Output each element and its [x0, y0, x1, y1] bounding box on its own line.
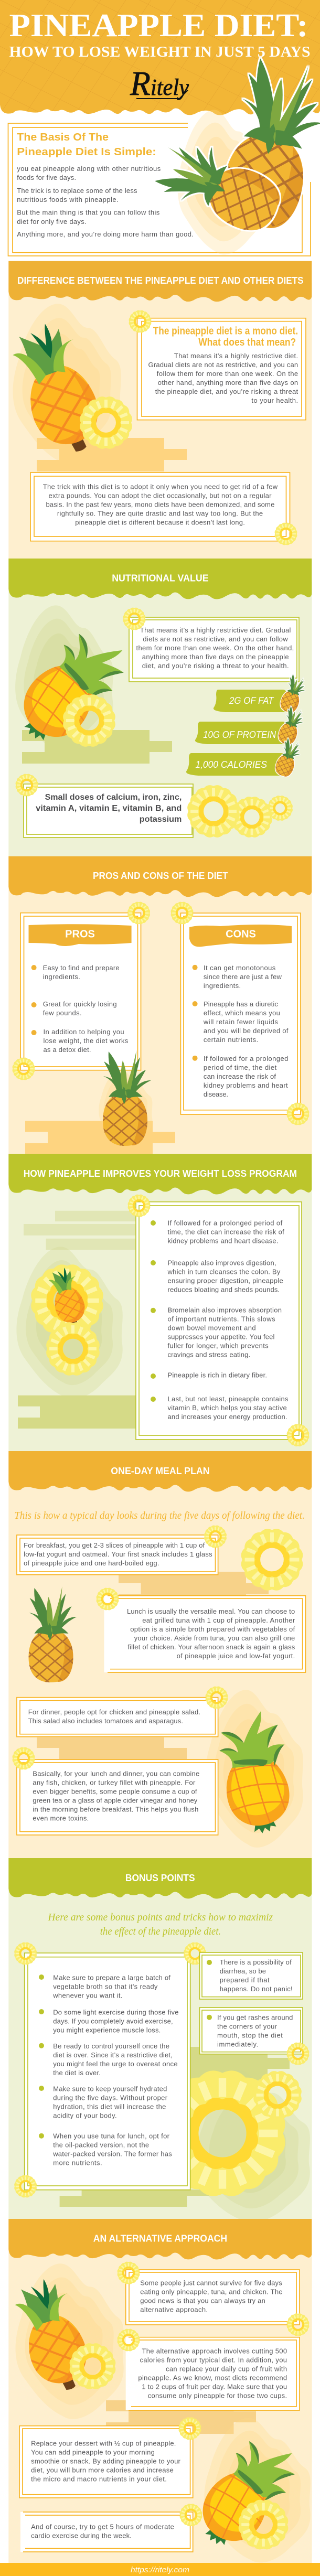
- icon: huge ring: [159, 2070, 285, 2196]
- icon: ring: [287, 1103, 309, 1125]
- list: benefits: ensuring proper digestion, pineapple: [168, 1276, 283, 1284]
- panel: diarrhea note: [199, 1952, 303, 1999]
- text: cutting calories: [138, 2347, 287, 2400]
- bricks: [119, 1572, 269, 1605]
- icon: pineapple: [0, 313, 132, 500]
- list: benefits: vitamin B, which helps you stay active: [168, 1404, 287, 1412]
- banner: nutritional value: [8, 559, 312, 599]
- banner: weight loss: [8, 1154, 312, 1195]
- text: restrictive diet: diet, and you’re risking a threat to your health.: [142, 662, 289, 670]
- list: bonus: When you use tuna for lunch, opt for: [53, 2132, 170, 2140]
- stat: protein: [195, 704, 307, 763]
- list: pros: [31, 964, 129, 1054]
- text: restrictive diet: That means it’s a highly restrictive diet. Gradual: [140, 626, 291, 634]
- list: benefits: which in turn cleanses the colon. By: [167, 1268, 281, 1275]
- text: mono diet: other hand, anything more than five days on: [158, 379, 298, 387]
- panel: bonus list: [14, 1942, 190, 2197]
- script intro: This is how a typical day looks during the five days of following the diet.: [14, 1510, 305, 1521]
- text block: basis: Anything more, and you’re doing more harm than good.: [17, 230, 194, 238]
- icon: ring: [171, 902, 193, 924]
- list: cons: [193, 964, 289, 1098]
- text: the trick: [43, 483, 278, 527]
- heading: basis: [17, 132, 156, 158]
- text block: basis: diet for only five days.: [17, 218, 87, 226]
- list: bonus: days. If you completely avoid exercise,: [53, 2017, 173, 2025]
- list: bonus: hydration, this diet will increase the: [53, 2102, 166, 2110]
- text: lunch: eat grilled tuna with 1 cup of pineapple. Another: [142, 1616, 295, 1624]
- blob behind pineapples: [178, 110, 265, 254]
- bricks: [22, 730, 172, 764]
- list: benefits: fuller for longer, which prevents: [168, 1342, 269, 1350]
- panel: alternative intro: [118, 2262, 309, 2336]
- text: combos: Basically, for your lunch and dinner, you can combine: [33, 1770, 199, 1778]
- text: rashes note: the corners of your: [217, 2023, 278, 2031]
- list: benefits: down bowel movement and: [168, 1324, 256, 1332]
- list: bonus: diet is over. Since it’s a restrictive diet,: [53, 2051, 173, 2059]
- list: cons: effect, which means you: [204, 1009, 280, 1017]
- text: cardio: [31, 2523, 174, 2540]
- text: the trick: The trick with this diet is to adopt it only when you need to get rid of a few: [43, 483, 278, 491]
- heading: basis: Pineapple Diet Is Simple:: [17, 146, 156, 158]
- text: cutting calories: calories from your typical diet. In addition, you: [140, 2356, 287, 2364]
- footer: https://ritely.com: [131, 2566, 189, 2574]
- text: alternative intro: Some people just cannot survive for five days: [140, 2279, 282, 2287]
- list: cons: and you will be deprived of: [204, 1027, 289, 1035]
- icon: large ring: [31, 1264, 103, 1337]
- label: cons: CONS: [226, 928, 256, 940]
- text: replace dessert: You can add pineapple to your morning: [31, 2448, 155, 2456]
- blob: [205, 1690, 303, 1848]
- list: benefits: kidney problems and heart disease.: [168, 1237, 278, 1245]
- list: pros: lose weight, the diet works: [43, 1037, 129, 1045]
- list: cons: If followed for a prolonged: [204, 1055, 288, 1062]
- bricks: [18, 1396, 136, 1429]
- icon: pineapple: [202, 1708, 304, 1841]
- text: micronutrients: Small doses of calcium, iron, zinc,: [45, 793, 182, 802]
- list: benefits: of important nutrients. This slows: [168, 1315, 275, 1323]
- list: cons: since there are just a few: [204, 973, 282, 981]
- blob: [13, 304, 121, 465]
- icon: pineapple ring: [80, 396, 132, 449]
- text: mono diet: Gradual diets are not as restrictive, and you can: [148, 361, 298, 369]
- icon: ring: [127, 902, 150, 924]
- label: pros: [28, 924, 132, 946]
- banner: nutritional value: NUTRITIONAL VALUE: [112, 573, 209, 584]
- icon: ring: [275, 523, 297, 545]
- header banner: [0, 0, 320, 126]
- banner: pros and cons: [8, 856, 312, 897]
- list: bonus: whenever you want it.: [52, 1992, 123, 2000]
- list: bonus: Do some light exercise during those five: [53, 2009, 178, 2016]
- list: cons: can increase the risk of: [204, 1072, 276, 1080]
- banner: pros and cons: PROS AND CONS OF THE DIET: [93, 871, 228, 881]
- text: diarrhea note: happens. Do not panic!: [220, 1985, 293, 1993]
- text block: basis: you eat pineapple along with other nutritious: [17, 165, 161, 173]
- text: breakfast: For breakfast, you get 2-3 slices of pineapple with 1 cup of: [24, 1541, 205, 1549]
- logo: Ritely: Ritely: [130, 65, 189, 103]
- blob: [16, 2263, 124, 2419]
- panel: cons: [171, 902, 309, 1125]
- icon: ring: [239, 2500, 288, 2549]
- list: pros: Easy to find and prepare: [43, 964, 120, 972]
- icon: ring: [253, 2071, 302, 2119]
- list: bonus: Make sure to prepare a large batch of: [53, 1974, 170, 1982]
- text: combos: green tea or a glass of apple cider vinegar and honey: [33, 1797, 198, 1805]
- list: benefits: Pineapple is rich in dietary fiber.: [168, 1371, 267, 1379]
- text: diarrhea note: There is a possibility of: [220, 1958, 292, 1966]
- text: combos: [33, 1770, 199, 1822]
- text: combos: in the morning before breakfast. This helps you flush: [33, 1806, 198, 1813]
- stat: calories: [186, 736, 304, 795]
- list: cons: ingredients.: [204, 982, 241, 990]
- list: cons: disease.: [204, 1090, 228, 1098]
- heading: mono diet: What does that mean?: [198, 337, 296, 348]
- icon: large ring: [241, 1529, 303, 1591]
- panel: restrictive diet: [123, 608, 299, 682]
- list: cons: certain nutrients.: [204, 1036, 258, 1044]
- text: dinner: For dinner, people opt for chicken and pineapple salad.: [28, 1708, 200, 1716]
- text: micronutrients: potassium: [140, 815, 182, 824]
- list: pros: In addition to helping you: [43, 1028, 124, 1036]
- text: cutting calories: The alternative approach involves cutting 500: [142, 2347, 287, 2355]
- list: benefits: If followed for a prolonged period of: [168, 1219, 283, 1227]
- panel: the trick: [30, 473, 297, 545]
- banner: difference: [8, 261, 312, 302]
- icon: ring: [97, 1588, 119, 1610]
- icon: ring: [287, 1424, 309, 1446]
- list: benefits: and increases your energy production.: [168, 1413, 287, 1421]
- text: rashes note: immediately.: [217, 2041, 258, 2048]
- text: restrictive diet: them for more than one week. On the other hand,: [136, 644, 294, 652]
- subtitle: HOW TO LOSE WEIGHT IN JUST 5 DAYS: [9, 44, 311, 60]
- panel: basis of the diet: [8, 53, 320, 305]
- list: bonus: [39, 1974, 178, 2167]
- icon: ring: [206, 1687, 228, 1709]
- banner: bonus points: [8, 1858, 312, 1899]
- list: pros: few pounds.: [43, 1009, 82, 1017]
- text: breakfast: low-fat yogurt and oatmeal. Your first snack includes 1 glass: [24, 1550, 212, 1558]
- text: replace dessert: the micro and macro nutrients in your diet.: [31, 2475, 167, 2483]
- list: benefits: [151, 1219, 289, 1421]
- blob: [204, 2418, 311, 2562]
- blob: [99, 1070, 152, 1145]
- icon: ring: [13, 1747, 35, 1769]
- icon: ring: [70, 2343, 115, 2389]
- script intro: the effect of the pineapple diet.: [100, 1926, 221, 1937]
- text block: basis: nutritious foods with pineapple.: [17, 196, 119, 203]
- text: diarrhea note: diarrhea, so be: [220, 1967, 266, 1975]
- text: lunch: option is a simple broth prepared with vegetables of: [130, 1625, 295, 1633]
- text block: basis: The trick is to replace some of the less: [17, 187, 137, 195]
- heading: mono diet: [153, 326, 298, 348]
- banner: bonus points: BONUS POINTS: [125, 1873, 195, 1883]
- icon: pineapple on ring: [41, 1264, 98, 1347]
- text: breakfast: [24, 1541, 212, 1567]
- text: mono diet: follow them for more than one week. On the: [157, 370, 298, 378]
- list: bonus: Be ready to control yourself once the: [53, 2042, 169, 2050]
- panel: one-day meal plan: [8, 1451, 312, 1858]
- panel: replace dessert: [19, 2417, 201, 2498]
- bricks: [37, 438, 187, 471]
- text: cardio: cardio exercise during the week.: [31, 2532, 132, 2540]
- text: lunch: [127, 1607, 295, 1660]
- text: mono diet: [148, 352, 298, 404]
- list: bonus: more nutrients.: [53, 2159, 102, 2167]
- banner: alternative: [8, 2219, 312, 2260]
- banner: weight loss: HOW PINEAPPLE IMPROVES YOUR WEIGHT LOSS PROGRAM: [24, 1168, 297, 1179]
- text: breakfast: of pineapple juice and one hard-boiled egg.: [24, 1559, 159, 1567]
- panel: cutting calories: [118, 2329, 300, 2410]
- panel: dinner: [17, 1687, 228, 1737]
- text: cutting calories: consume only pineapple for those two cups.: [148, 2392, 287, 2400]
- list: cons: kidney problems and heart: [204, 1081, 288, 1089]
- footer: [0, 2563, 320, 2576]
- text: combos: any fish, chicken, or turkey fillet with pineapple. For: [33, 1779, 196, 1787]
- list: cons: will retain fewer liquids: [203, 1018, 278, 1026]
- icon: pineapple: [103, 1050, 151, 1186]
- stat: fat: [214, 672, 309, 731]
- list: pros: as a detox diet.: [43, 1046, 91, 1054]
- text: alternative intro: good news is that you can always try an: [140, 2296, 265, 2304]
- text: rashes note: [217, 2014, 293, 2048]
- heading: basis: The Basis Of The: [17, 132, 109, 143]
- banner: alternative: AN ALTERNATIVE APPROACH: [93, 2234, 227, 2244]
- text: restrictive diet: anything more than five days on the pineapple: [142, 653, 289, 661]
- icon: ring: [184, 1942, 206, 1965]
- text: the trick: rightfully so. They are quite drastic and last way too long. But the: [57, 510, 263, 518]
- list: benefits: cravings and stress eating.: [168, 1351, 250, 1359]
- icon: large pineapple: [201, 53, 320, 305]
- blob: [186, 2070, 310, 2223]
- text: lunch: of pineapple juice and low-fat yogurt.: [177, 1652, 295, 1660]
- text: lunch: your choice. Aside from tuna, you can also grill one: [134, 1634, 295, 1642]
- text: combos: even more toxins.: [33, 1815, 89, 1822]
- text: mono diet: to your health.: [251, 396, 298, 404]
- icon: ring: [46, 1322, 100, 1376]
- list: benefits: Bromelain also improves absorption: [168, 1306, 282, 1314]
- panel: pros: [13, 902, 150, 1080]
- text: lunch: fillet of chicken. Your afternoon snack is again a glass: [127, 1643, 295, 1651]
- list: cons: It can get monotonous: [204, 964, 276, 972]
- icon: pineapple: [2, 615, 135, 759]
- text: mono diet: the pineapple diet, and you’re risking a threat: [155, 388, 298, 395]
- banner: difference: DIFFERENCE BETWEEN THE PINEAPPLE DIET AND OTHER DIETS: [17, 275, 304, 286]
- list: bonus: Make sure to keep yourself hydrated: [53, 2085, 167, 2092]
- list: bonus: you might experience muscle loss.: [53, 2026, 161, 2034]
- text: rashes note: mouth, stop the diet: [217, 2032, 283, 2040]
- light bars: [24, 1211, 136, 1250]
- list: benefits: time, the diet can increase the risk of: [168, 1228, 284, 1236]
- icon: ring: [63, 694, 115, 747]
- stat: protein: 10G OF PROTEIN: [203, 729, 276, 740]
- text: mono diet: That means it’s a highly restrictive diet.: [174, 352, 298, 360]
- text block: basis: foods for five days.: [17, 174, 76, 181]
- text: replace dessert: Replace your dessert with ½ cup of pineapple.: [31, 2439, 176, 2447]
- icon: ring: [13, 1058, 35, 1080]
- list: benefits: suppresses your appetite. You feel: [168, 1333, 275, 1341]
- icon: ring: [118, 2329, 140, 2351]
- text: replace dessert: smoothie or snack. By adding pineapple to your: [31, 2457, 181, 2465]
- list: bonus: vegetable broth so that it’s ready: [53, 1983, 158, 1991]
- text: dinner: [28, 1708, 200, 1725]
- text: restrictive diet: [136, 626, 294, 670]
- label: pros: PROS: [65, 928, 95, 940]
- icon: pineapple: [183, 2424, 305, 2561]
- text: the trick: pineapple diet is different because it doesn’t last long.: [75, 519, 245, 527]
- panel: pros and cons: [8, 856, 312, 1186]
- text: alternative intro: alternative approach.: [140, 2305, 208, 2313]
- text: diarrhea note: prepared if that: [220, 1976, 270, 1984]
- text: the trick: basis. In the past few years, mono diets have been demonized, and some: [46, 501, 274, 509]
- list: bonus: acidity of your body.: [53, 2111, 117, 2119]
- icon: ring: [14, 1942, 37, 1965]
- icons: three rings: [187, 785, 293, 838]
- bricks: [106, 2400, 256, 2434]
- text: cardio: And of course, try to get 5 hours of moderate: [31, 2523, 174, 2531]
- text: cutting calories: pineapple. As we know, most diets recommend: [138, 2374, 287, 2381]
- panel: benefits list: [128, 1195, 309, 1446]
- icon: ring: [128, 1195, 150, 1217]
- text: rashes note: If you get rashes around: [217, 2014, 293, 2022]
- stat: calories: 1,000 CALORIES: [195, 759, 267, 770]
- icon: ring: [123, 608, 145, 630]
- bricks: [25, 1121, 175, 1154]
- text: alternative intro: [140, 2279, 282, 2313]
- banner: meal plan: ONE-DAY MEAL PLAN: [111, 1466, 210, 1476]
- list: benefits: Last, but not least, pineapple contains: [168, 1395, 289, 1403]
- list: bonus: you might feel the urge to overeat once: [53, 2060, 178, 2068]
- text: restrictive diet: diets are not as restrictive, and you can follow: [143, 635, 288, 643]
- icon: small pineapple: [150, 130, 320, 262]
- text: replace dessert: diet, you will burn more calories and increase: [31, 2466, 174, 2474]
- panel: alternative approach: [1, 2219, 312, 2563]
- bricks: [37, 1737, 187, 1770]
- list: bonus: the diet is over.: [53, 2069, 101, 2077]
- icon: ring: [204, 1526, 227, 1548]
- text: cutting calories: can replace your daily cup of fruit with: [166, 2365, 287, 2373]
- text: alternative intro: eating only pineapple, tuna, and chicken. The: [140, 2288, 282, 2295]
- icon: ring: [179, 2417, 201, 2440]
- label: cons: [189, 925, 292, 947]
- text: cutting calories: 1 to 2 cups of fruit per day. Make sure that you: [142, 2382, 287, 2390]
- icon: ring: [180, 2504, 202, 2526]
- icon: pineapple standing: [28, 1586, 77, 1723]
- list: cons: Pineapple has a diuretic: [204, 1000, 278, 1008]
- list: benefits: Pineapple also improves digestion,: [168, 1259, 276, 1266]
- icon: ring: [287, 2043, 309, 2065]
- text: the trick: extra pounds. You can adopt the diet occasionally, but not on a regular: [49, 492, 272, 500]
- panel: nutritional value: [2, 559, 312, 856]
- list: pros: Great for quickly losing: [43, 1000, 117, 1008]
- panel: difference section: [0, 261, 312, 559]
- list: bonus: water-packed version. The former has: [52, 2150, 172, 2158]
- panel: mono diet: [129, 310, 306, 420]
- panel: lunch: [97, 1588, 306, 1672]
- panel: bonus points: [8, 1858, 312, 2223]
- script intro: Here are some bonus points and tricks how to maximiz: [47, 1912, 273, 1923]
- bricks: [60, 2047, 290, 2207]
- text: micronutrients: [36, 793, 182, 824]
- stat: fat: 2G OF FAT: [229, 695, 274, 706]
- text block: basis: But the main thing is that you can follow this: [17, 209, 160, 216]
- text block: basis: [17, 165, 194, 238]
- list: bonus: during the five days. Without proper: [53, 2094, 168, 2101]
- list: cons: period of time, the diet: [204, 1064, 277, 1071]
- panel: weight loss program: [8, 1154, 312, 1451]
- panel: lunch and dinner combos: [13, 1747, 218, 1835]
- text: replace dessert: [31, 2439, 181, 2483]
- script intro: [47, 1912, 273, 1937]
- text: lunch: Lunch is usually the versatile meal. You can choose to: [127, 1607, 295, 1615]
- text: diarrhea note: [220, 1958, 293, 1993]
- blob: [16, 1247, 123, 1399]
- panel: breakfast: [17, 1526, 227, 1575]
- title: PINEAPPLE DIET:: [9, 8, 308, 44]
- panel: cardio: [20, 2504, 202, 2552]
- heading: mono diet: The pineapple diet is a mono diet.: [153, 326, 298, 337]
- icon: ring: [129, 310, 151, 332]
- icon: pineapple: [1, 2271, 114, 2431]
- banner: meal plan: [8, 1451, 312, 1492]
- list: benefits: reduces bloating and sheds pounds.: [168, 1285, 280, 1293]
- icon: ring: [287, 2313, 309, 2336]
- blob: [15, 605, 113, 756]
- list: bonus: the oil-packed version, not the: [53, 2141, 149, 2149]
- icon: ring: [16, 774, 38, 796]
- text: dinner: This salad also includes tomatoes and asparagus.: [28, 1717, 183, 1725]
- text: combos: even bigger benefits, some people consume a cup of: [33, 1788, 197, 1796]
- panel: rashes note: [199, 2008, 309, 2065]
- icon: ring: [14, 2175, 37, 2197]
- icon: ring: [118, 2262, 140, 2284]
- text: micronutrients: vitamin A, vitamin E, vitamin B, and: [36, 804, 182, 813]
- panel: micronutrients: [16, 774, 193, 838]
- list: pros: ingredients.: [43, 973, 80, 981]
